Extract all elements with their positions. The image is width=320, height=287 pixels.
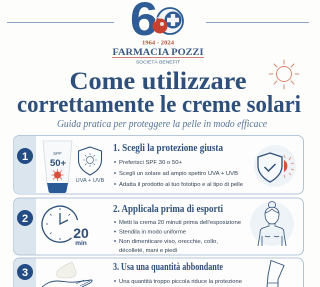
title: Come utilizzare — [70, 68, 246, 95]
icon: sun — [269, 60, 299, 89]
panel: step 3 — [14, 258, 304, 287]
bullets: step 1 — [114, 160, 243, 188]
bullets: step 3: Una quantità troppo piccola riduce la protezione — [119, 279, 242, 285]
bullets: step 2 — [114, 220, 241, 254]
heading: step 3: 3. Usa una quantità abbondante — [113, 262, 223, 273]
icon: protected shield with sun — [254, 145, 296, 187]
step number 3 — [17, 264, 33, 280]
icon: clock 20 minutes — [42, 206, 89, 247]
title: correttamente le creme solari — [17, 92, 301, 118]
step number 2: 2 — [22, 213, 28, 225]
icon: cream on hand — [42, 262, 92, 287]
logo: Farmacia Pozzi 60 years — [112, 0, 204, 64]
title — [17, 68, 301, 118]
bullets: step 1: Scegli un solare ad ampio spettro UVA + UVB — [119, 171, 238, 177]
icon: empty tube — [267, 260, 284, 287]
icon: woman applying cream — [250, 202, 294, 246]
heading: step 2: 2. Applicala prima di esporti — [113, 204, 223, 215]
bullets: step 2: décolleté, mani e piedi — [119, 248, 177, 254]
step number 2 — [17, 210, 33, 226]
icon: UVA UVB shield — [76, 147, 105, 184]
panel: step 1 — [14, 136, 304, 194]
bullets: step 2: Stendila in modo uniforme — [119, 230, 186, 236]
bullets: step 1: Adatta il prodotto al tuo fototipo e al tipo di pelle — [119, 182, 243, 188]
icon: clock 20 minutes: min — [75, 240, 87, 247]
step number 1: 1 — [22, 151, 28, 163]
icon: sunscreen tube: SPF — [53, 151, 62, 156]
panel: step 2 — [14, 198, 304, 255]
step number 3: 3 — [22, 267, 28, 279]
logo years: 1964 - 2024 — [142, 40, 174, 46]
logo name: FARMACIA POZZI — [112, 48, 204, 58]
icon: sunscreen tube: 50+ — [50, 158, 67, 169]
logo tagline: SOCIETÀ BENEFIT — [136, 60, 181, 64]
logo number 0 with cross — [152, 8, 183, 34]
bullets: step 1: Preferisci SPF 30 o 50+ — [119, 160, 183, 166]
icon: sunscreen tube — [43, 141, 72, 193]
step number 1 — [17, 148, 33, 164]
heading: step 1: 1. Scegli la protezione giusta — [113, 143, 223, 154]
bullets: step 2: Non dimenticare viso, orecchie, collo, — [119, 239, 218, 245]
subtitle: Guida pratica per proteggere la pelle in modo efficace — [57, 119, 268, 130]
icon: clock 20 minutes: 20 — [73, 225, 89, 241]
icon: UVA UVB shield: UVA + UVB — [76, 178, 105, 184]
bullets: step 2: Metti la crema 20 minuti prima dell'esposizione — [119, 220, 241, 226]
